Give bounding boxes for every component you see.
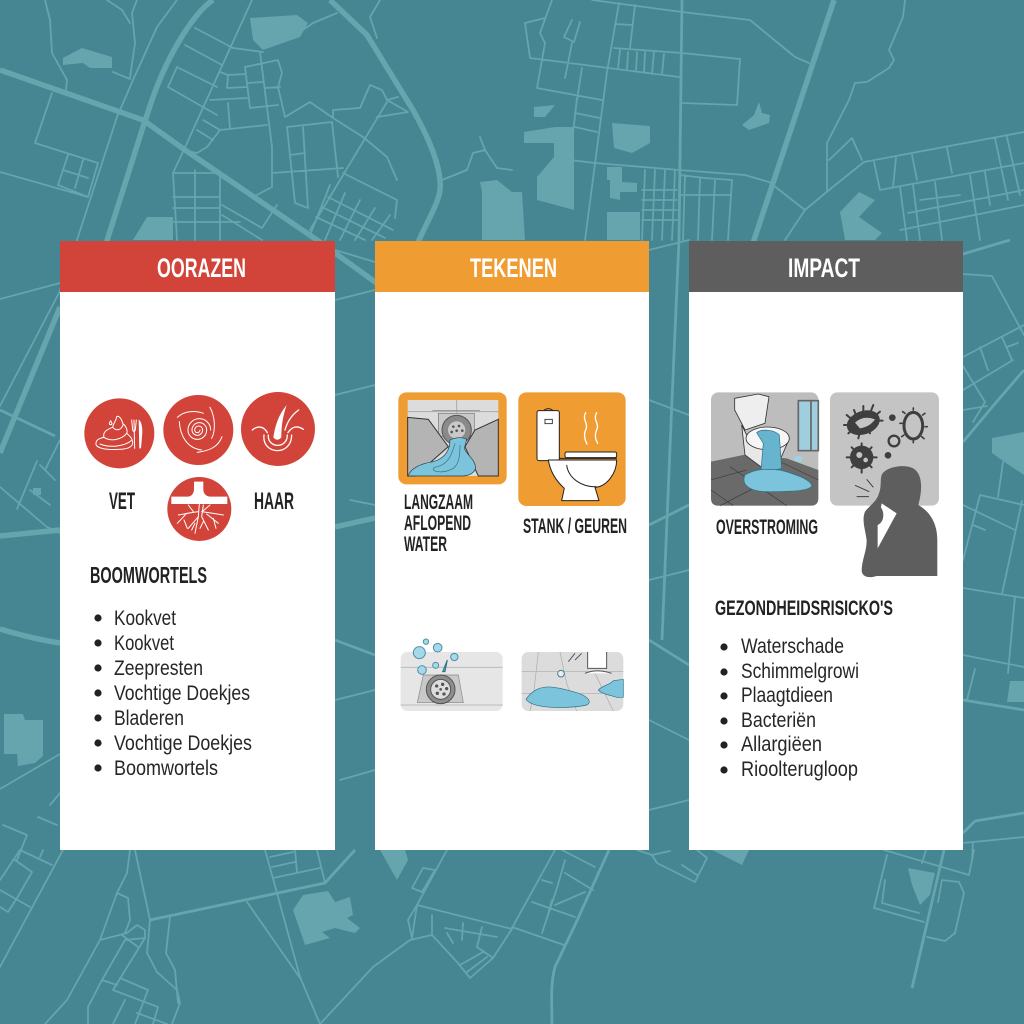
label: langzaam aflopend water: AFLOPEND — [404, 512, 471, 535]
icon: toilet stank — [518, 392, 626, 506]
icon: boomwortels — [167, 477, 231, 541]
icon: langzaam aflopend water — [398, 392, 507, 484]
header: impact: IMPACT — [788, 253, 860, 283]
list: impact: Allargiëen — [741, 733, 822, 756]
label: vet: VET — [109, 488, 135, 515]
list: impact — [720, 635, 859, 781]
list: oorzaken — [94, 607, 252, 780]
header: impact — [689, 241, 963, 292]
list: oorzaken: Zeepresten — [114, 657, 203, 680]
list: impact: Waterschade — [741, 635, 844, 658]
label: langzaam aflopend water — [404, 491, 473, 556]
list: oorzaken: Boomwortels — [114, 757, 218, 780]
header: tekenen — [375, 241, 649, 292]
list: oorzaken: Vochtige Doekjes — [114, 682, 250, 705]
icon: borrelende afvoer — [401, 639, 503, 711]
list: impact: Schimmelgrowi — [741, 660, 859, 683]
icon: spiraal — [163, 395, 233, 465]
header: tekenen: TEKENEN — [470, 253, 557, 283]
panel: tekenen — [375, 241, 649, 850]
icon: overstroming — [711, 392, 818, 506]
label: haar: HAAR — [254, 488, 294, 515]
list: impact: Plaagtdieen — [741, 684, 833, 707]
icon: vet — [84, 398, 154, 468]
label: langzaam aflopend water: WATER — [404, 533, 447, 556]
label: overstroming: OVERSTROMING — [716, 516, 818, 539]
panel: oorzaken — [60, 241, 335, 850]
list: impact: Rioolterugloop — [741, 758, 858, 781]
list: oorzaken: Vochtige Doekjes — [114, 732, 252, 755]
icon: ziektekiemen en hoestende persoon — [830, 392, 939, 577]
icon: haar — [241, 392, 315, 466]
label: langzaam aflopend water: LANGZAAM — [404, 491, 473, 514]
icon: plassen op de vloer — [522, 652, 623, 711]
list: impact: Bacteriën — [741, 709, 816, 732]
list: oorzaken: Kookvet — [114, 632, 174, 655]
subheading: gezondheidsrisico's: GEZONDHEIDSRISICKO'S — [715, 597, 893, 620]
label: stank / geuren: STANK / GEUREN — [523, 515, 627, 538]
header: oorazen — [60, 241, 335, 292]
subheading: boomwortels: BOOMWORTELS — [90, 562, 207, 588]
header: oorazen: OORAZEN — [157, 253, 246, 283]
list: oorzaken: Bladeren — [114, 707, 184, 730]
panel: impact — [689, 241, 963, 850]
list: oorzaken: Kookvet — [114, 607, 176, 630]
